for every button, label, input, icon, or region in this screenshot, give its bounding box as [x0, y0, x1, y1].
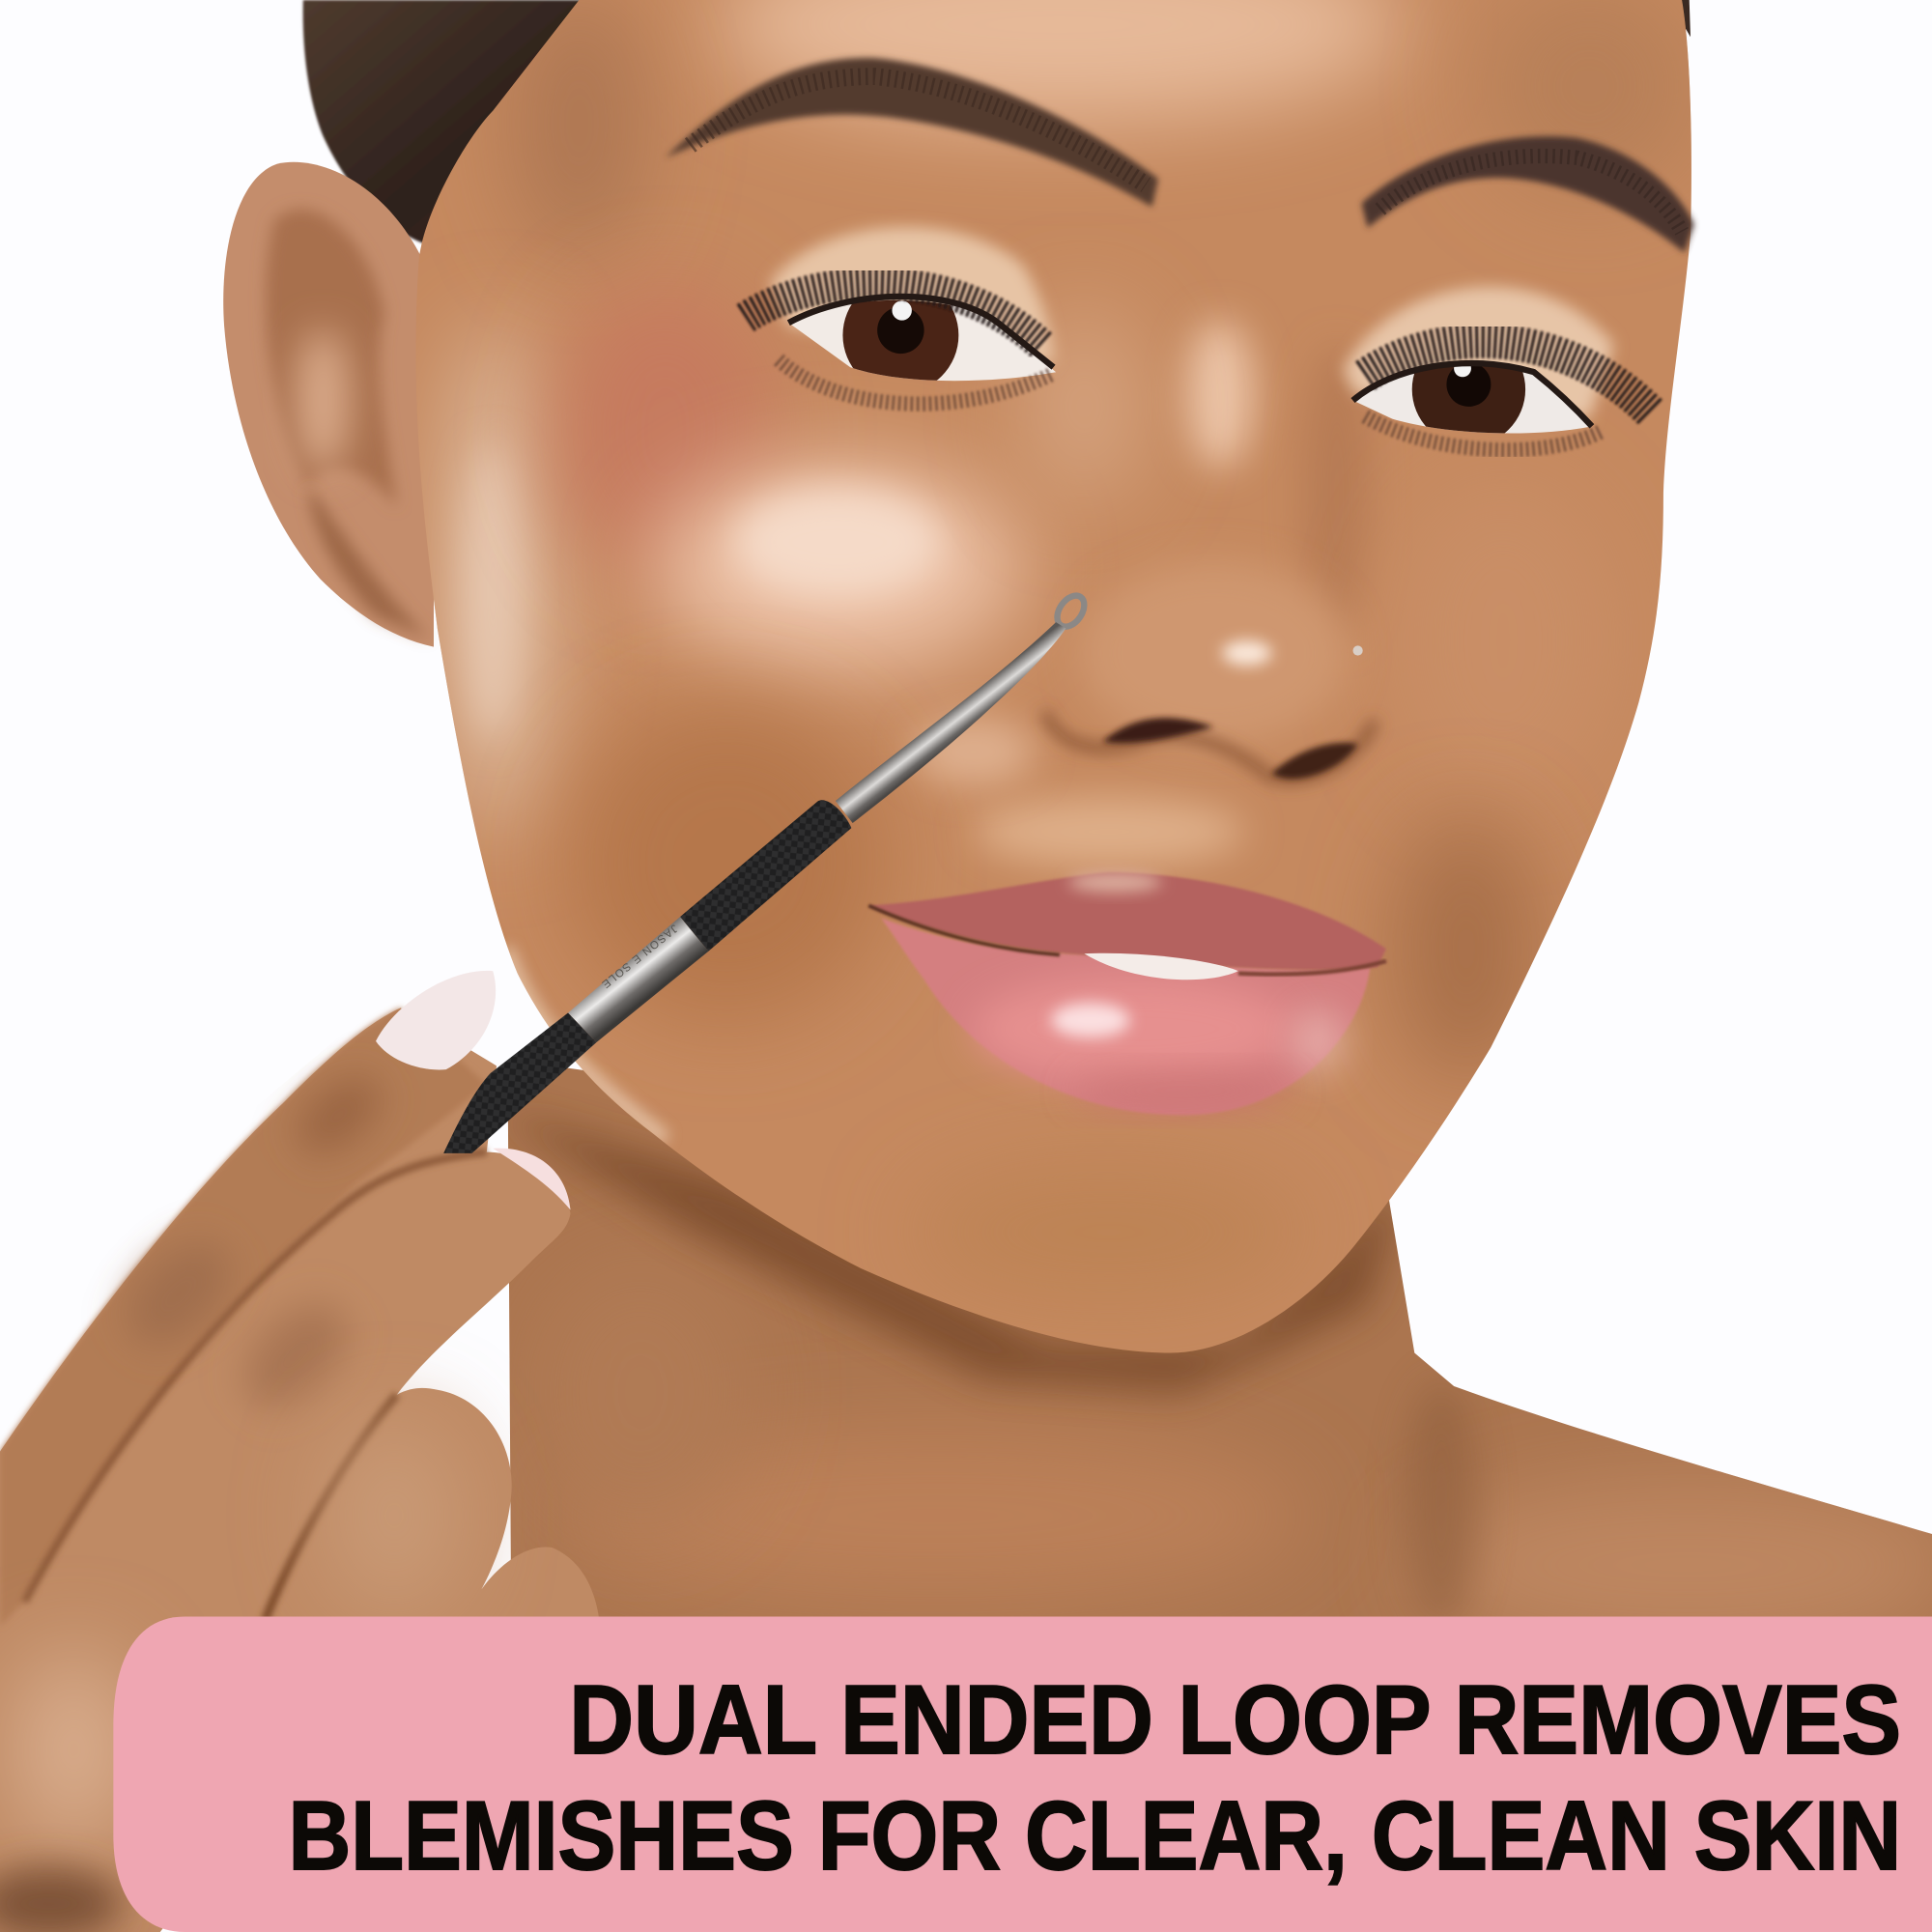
thin shaft: [836, 622, 1065, 823]
nose: [1045, 560, 1375, 780]
side of face highlight: [438, 321, 560, 838]
middle nail: [493, 1149, 571, 1210]
hand: [0, 971, 600, 1932]
extraction tool: [443, 590, 1090, 1153]
knuckles: [109, 1224, 248, 1363]
blush: [554, 283, 777, 579]
index finger shade: [0, 1008, 487, 1627]
lower lip: [881, 918, 1370, 1115]
brand text on barrel: JASON E SOLE: [599, 922, 679, 990]
jaw edge highlight: [505, 949, 666, 1140]
under lip and chin: [992, 1196, 1226, 1269]
loop tip: [1052, 590, 1090, 632]
hand silhouette: [0, 1008, 600, 1932]
right eyebrow: [1361, 136, 1694, 252]
teeth: [1084, 953, 1238, 980]
upper lip: [868, 872, 1386, 970]
caption banner: [113, 1616, 1932, 1932]
philtrum highlight: [974, 797, 1244, 867]
silver barrel: [568, 917, 708, 1042]
eyelid: [770, 227, 1054, 363]
cheek highlight: [653, 462, 1023, 671]
lower black grip: [443, 1012, 596, 1153]
right eye: [1343, 287, 1651, 450]
face: [416, 0, 1700, 1353]
lips: [868, 872, 1386, 1115]
nose bridge highlight: [1185, 321, 1254, 469]
index nail: [376, 971, 496, 1069]
left eye: [746, 227, 1065, 404]
shade along nose: [1307, 369, 1368, 603]
eyelid: [1343, 287, 1614, 419]
upper black grip: [680, 800, 851, 952]
mid cheek: [567, 702, 887, 1023]
right cheek: [1392, 480, 1614, 801]
hair: [303, 0, 1690, 244]
forehead highlight: [715, 0, 1405, 124]
ear: [223, 162, 434, 647]
crease between fingers: [25, 1152, 487, 1602]
neck and shoulder: [508, 1068, 1932, 1617]
left eyebrow: [666, 58, 1158, 207]
